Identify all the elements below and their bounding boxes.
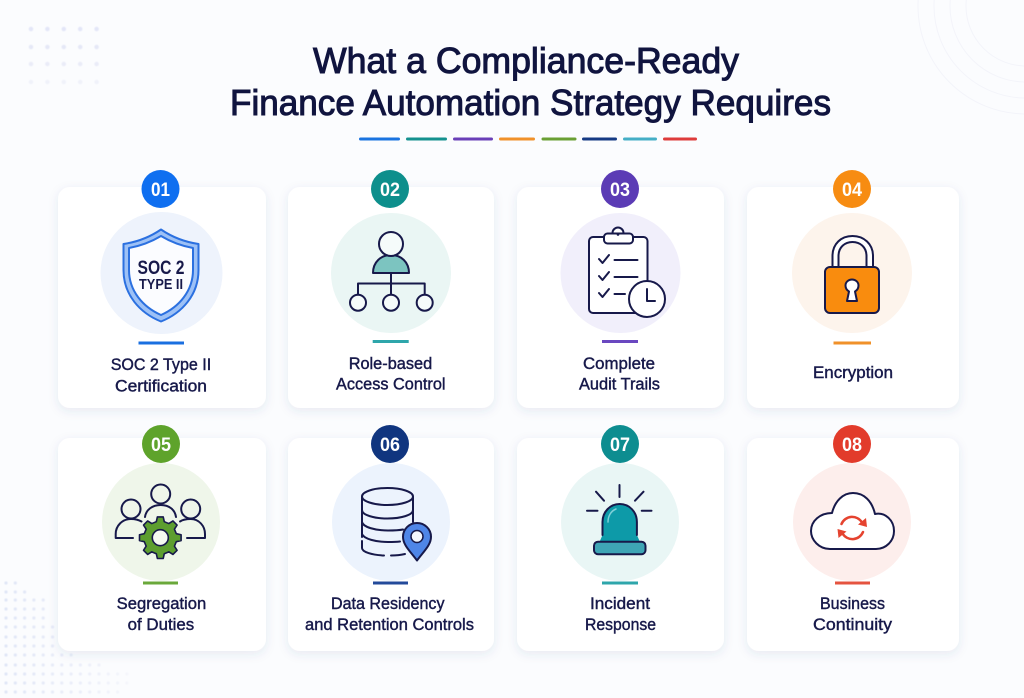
panel: Data Residency and Retention Controls bbox=[288, 425, 494, 651]
icon: SOC 2 shield: TYPE II bbox=[139, 276, 183, 293]
label: Business bbox=[820, 595, 885, 613]
label bbox=[579, 355, 660, 394]
badge 03 bbox=[601, 170, 639, 208]
accent line bbox=[834, 342, 871, 344]
accent line bbox=[373, 340, 409, 343]
label: Complete bbox=[583, 355, 655, 373]
label: Role-based bbox=[349, 355, 432, 373]
badge 03: 03 bbox=[610, 180, 630, 201]
accent line bbox=[373, 582, 408, 584]
panel: Role-based Access Control bbox=[288, 170, 494, 408]
panel: Segregation of Duties bbox=[58, 425, 266, 651]
label: Audit Trails bbox=[579, 376, 660, 394]
badge 08 bbox=[833, 425, 871, 463]
badge 01 bbox=[142, 170, 180, 208]
label bbox=[305, 595, 474, 634]
badge 02 bbox=[371, 170, 409, 208]
icon: team with gear bbox=[102, 463, 220, 581]
accent line bbox=[138, 342, 184, 344]
label: Certification bbox=[115, 378, 207, 396]
icon: alarm siren bbox=[561, 463, 679, 581]
label: of Duties bbox=[128, 616, 194, 634]
badge 07 bbox=[601, 425, 639, 463]
panel: SOC 2 Type II Certification bbox=[58, 170, 266, 408]
label: Data Residency bbox=[331, 595, 445, 613]
icon: cloud with sync arrows bbox=[793, 463, 911, 581]
accent line bbox=[835, 582, 870, 584]
accent line bbox=[602, 582, 638, 584]
title: Finance Automation Strategy Requires bbox=[230, 82, 831, 123]
label: Encryption bbox=[813, 364, 893, 382]
label bbox=[585, 595, 656, 634]
label: SOC 2 Type II bbox=[111, 356, 211, 374]
label: Access Control bbox=[336, 376, 446, 394]
panel: Business Continuity bbox=[747, 425, 959, 651]
panel: Encryption bbox=[747, 170, 959, 408]
label bbox=[336, 355, 446, 394]
badge 04: 04 bbox=[842, 180, 862, 201]
badge 06 bbox=[371, 425, 409, 463]
accent line bbox=[602, 340, 638, 343]
badge 01: 01 bbox=[151, 180, 170, 201]
title bbox=[230, 40, 831, 123]
panel: Incident Response bbox=[517, 425, 724, 651]
label: Incident bbox=[590, 595, 650, 613]
badge 07: 07 bbox=[610, 435, 630, 456]
icon: database with location pin bbox=[332, 463, 450, 581]
badge 05 bbox=[142, 425, 180, 463]
icon: padlock bbox=[792, 213, 912, 333]
panel: Complete Audit Trails bbox=[517, 170, 724, 408]
icon: SOC 2 shield: SOC 2 bbox=[138, 258, 184, 279]
label bbox=[111, 356, 211, 396]
badge 08: 08 bbox=[842, 435, 862, 456]
icon: role hierarchy bbox=[331, 213, 451, 333]
badge 02: 02 bbox=[380, 180, 400, 201]
label: Response bbox=[585, 616, 656, 634]
title colour underline bbox=[359, 138, 697, 140]
badge 05: 05 bbox=[151, 435, 171, 456]
title: What a Compliance-Ready bbox=[313, 40, 739, 81]
label: Segregation bbox=[117, 595, 206, 613]
label: and Retention Controls bbox=[305, 616, 474, 634]
icon: SOC 2 shield bbox=[100, 212, 222, 334]
label: Continuity bbox=[813, 616, 893, 634]
accent line bbox=[143, 582, 178, 584]
icon: clipboard with clock bbox=[560, 213, 680, 333]
label bbox=[813, 595, 893, 634]
label bbox=[117, 595, 206, 634]
badge 04 bbox=[833, 170, 871, 208]
badge 06: 06 bbox=[380, 435, 400, 456]
